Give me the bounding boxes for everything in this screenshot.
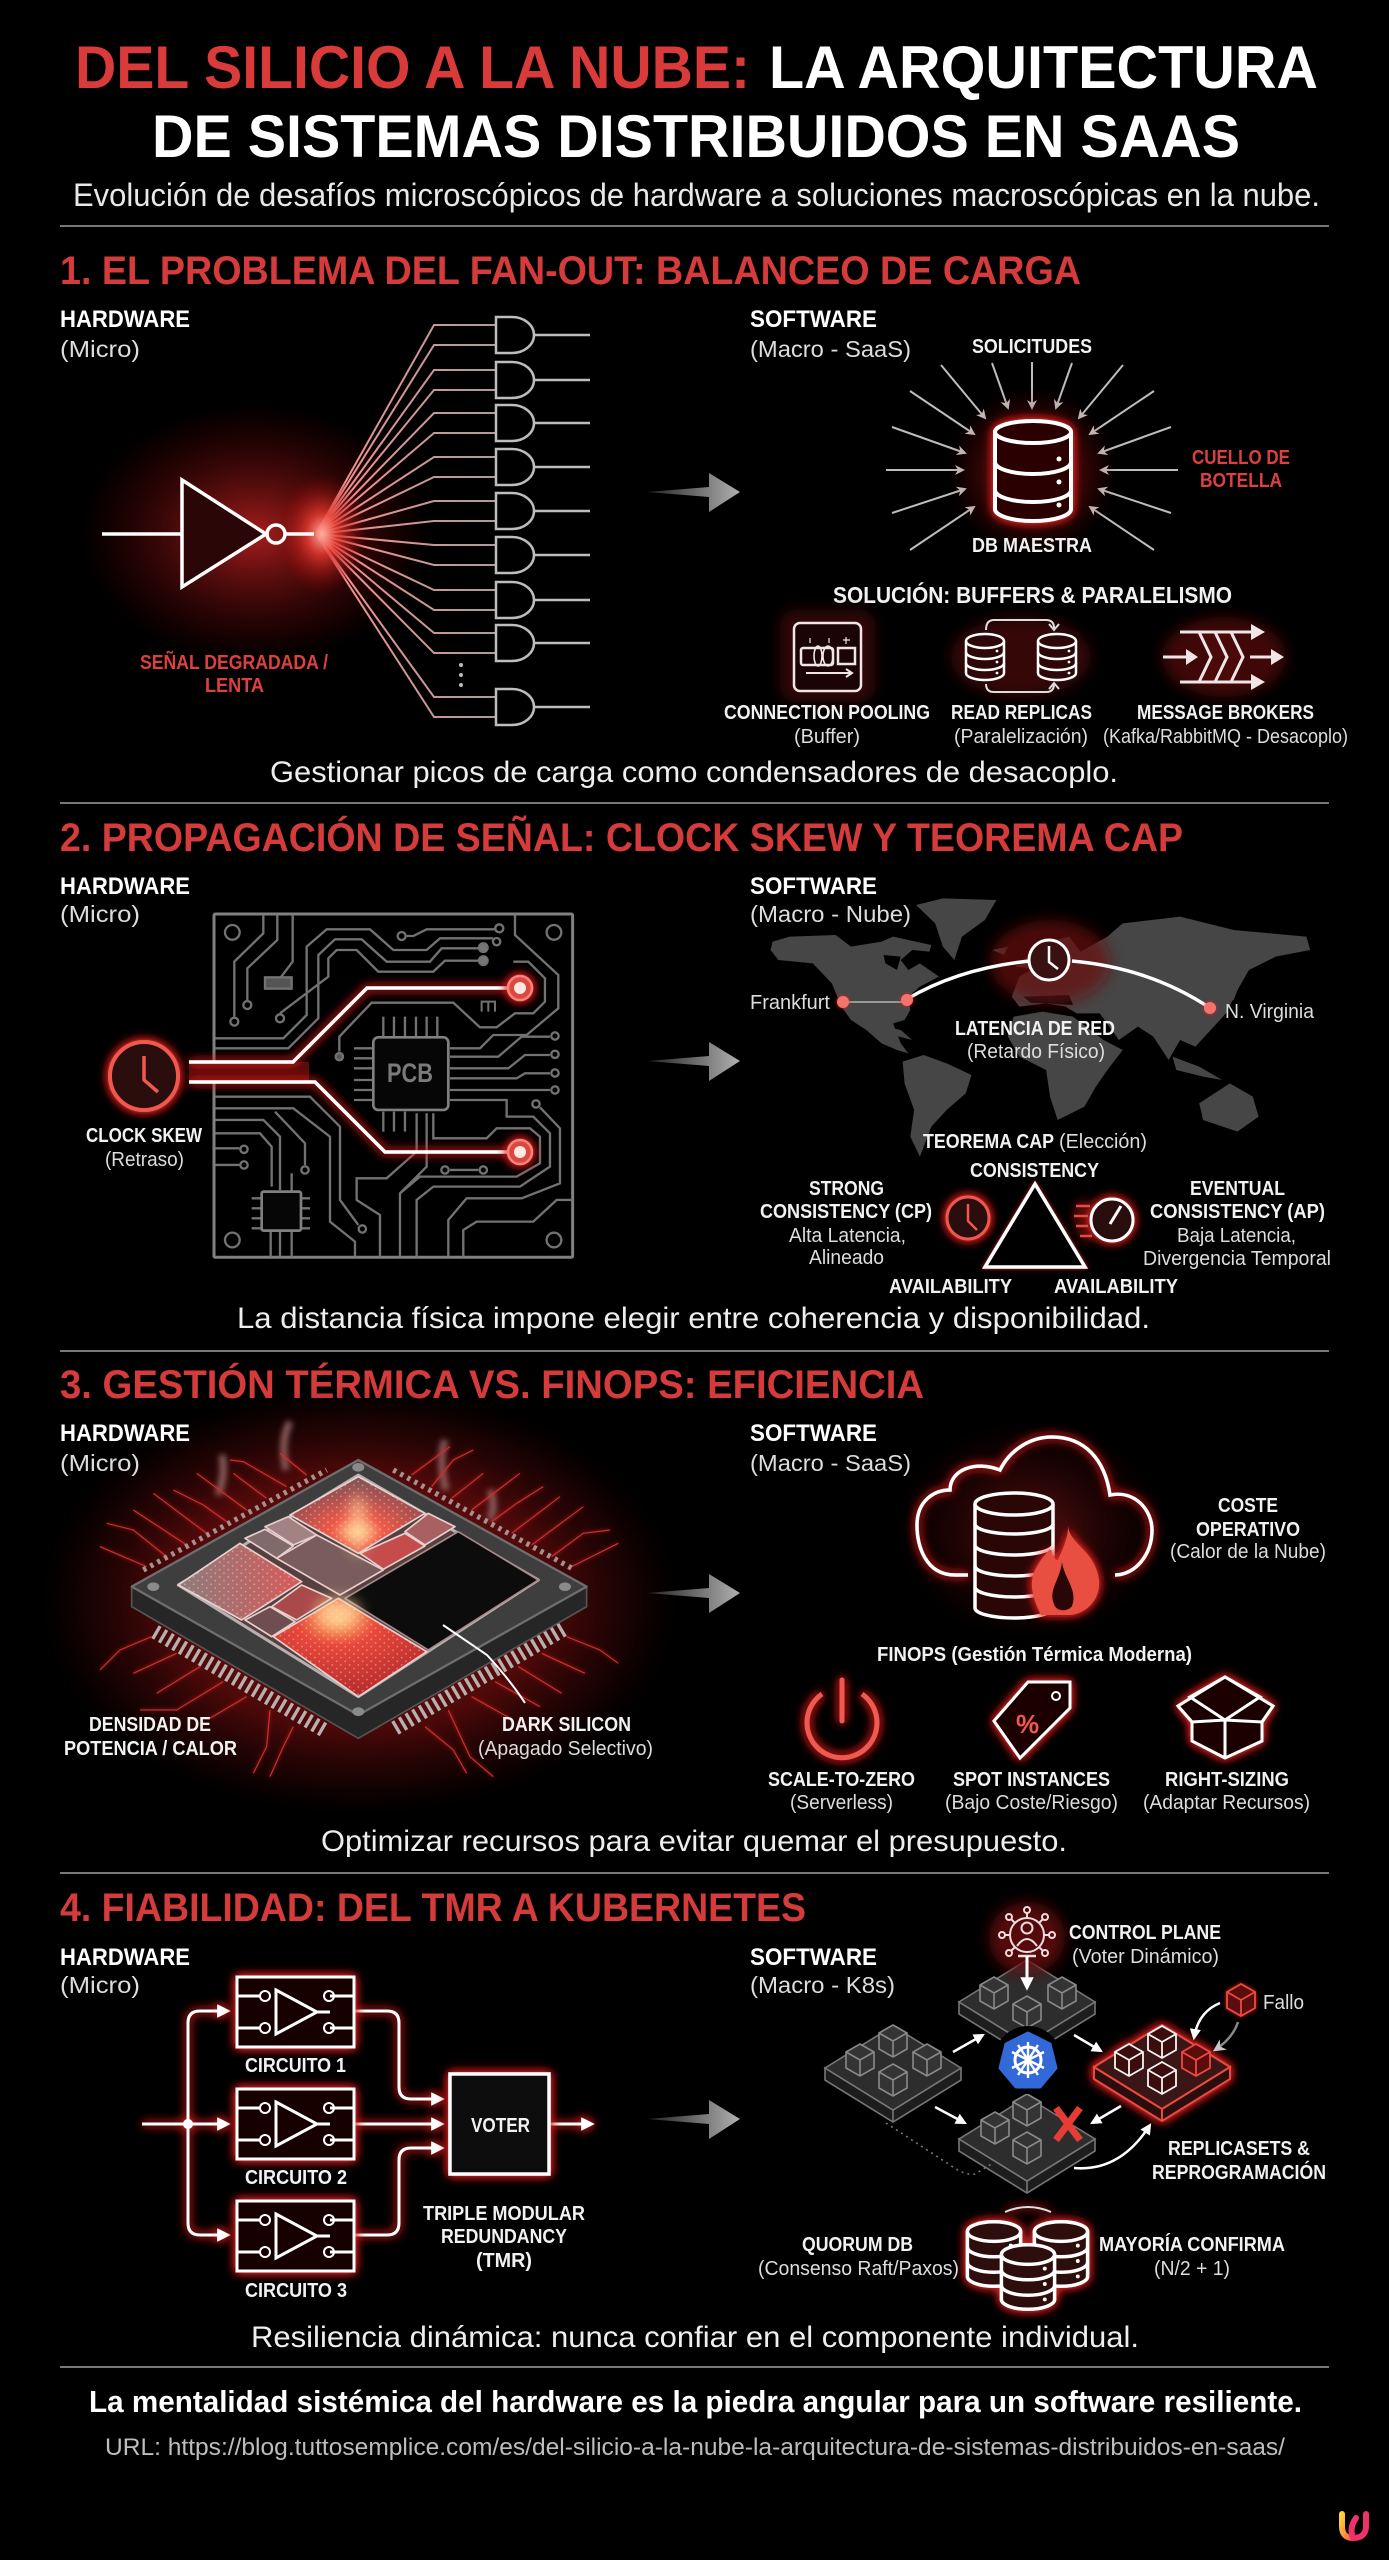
map labels — [750, 992, 1315, 1063]
cap triangle — [985, 1184, 1085, 1267]
quorum labels: (N/2 + 1) — [1154, 2258, 1230, 2280]
software label — [750, 1420, 911, 1476]
hardware label: (Micro) — [60, 901, 140, 927]
tmr label — [423, 2203, 585, 2272]
heading 1: 1. EL PROBLEMA DEL FAN-OUT: BALANCEO DE CARGA — [60, 249, 1081, 293]
cost label: OPERATIVO — [1196, 1519, 1300, 1541]
chip and die — [132, 1460, 587, 1738]
control plane label — [1069, 1922, 1221, 1968]
chip labels — [64, 1714, 653, 1760]
solution labels: (Buffer) — [794, 726, 860, 748]
icon: quorum db — [967, 2207, 1088, 2309]
map labels: LATENCIA DE RED — [955, 1018, 1115, 1040]
tag percent: % — [1016, 1709, 1039, 1739]
arrow — [647, 1042, 740, 1081]
title: LA ARQUITECTURA — [769, 34, 1318, 101]
finops labels: RIGHT-SIZING — [1165, 1769, 1289, 1791]
finops labels: SPOT INSTANCES — [953, 1769, 1110, 1791]
failed cube — [1227, 1984, 1255, 2016]
red label degraded signal: LENTA — [205, 675, 264, 697]
cap labels: Alta Latencia, — [789, 1225, 906, 1247]
solution labels — [724, 702, 1348, 748]
clock skew label: CLOCK SKEW — [86, 1125, 202, 1147]
cap labels: Baja Latencia, — [1177, 1225, 1296, 1247]
pcb chip label: PCB — [387, 1058, 433, 1088]
circuit labels: CIRCUITO 2 — [245, 2167, 347, 2189]
panel: section 3 thermal — [39, 1361, 1326, 1858]
quorum labels: QUORUM DB — [802, 2234, 913, 2256]
icon: box — [1178, 1677, 1273, 1758]
software label: (Macro - K8s) — [750, 1972, 895, 1998]
glow behind inverter — [80, 404, 430, 664]
master database icon — [948, 387, 1118, 557]
solution labels: (Paralelización) — [954, 726, 1088, 748]
logic gates — [459, 317, 590, 725]
caption 4: Resiliencia dinámica: nunca confiar en el componente individual. — [251, 2321, 1139, 2354]
circuit labels: CIRCUITO 1 — [245, 2055, 346, 2077]
tmr label: TRIPLE MODULAR — [423, 2203, 585, 2225]
chip pins lower — [155, 1628, 565, 1732]
skew glow band — [189, 1062, 309, 1082]
heat wisps — [218, 1422, 493, 1520]
cap heading: TEOREMA CAP — [923, 1131, 1054, 1153]
clock skew label — [86, 1125, 202, 1171]
pcb traces — [214, 914, 573, 1257]
quorum labels: MAYORÍA CONFIRMA — [1099, 2233, 1285, 2256]
icon: slow clock — [947, 1197, 989, 1239]
software label: (Macro - SaaS) — [750, 1450, 911, 1476]
glow at fan origin — [277, 474, 367, 594]
bottleneck label: CUELLO DE — [1192, 447, 1290, 469]
finops labels: (Bajo Coste/Riesgo) — [945, 1792, 1118, 1814]
hardware label — [60, 1420, 190, 1476]
hardware label — [60, 1944, 190, 1998]
chip labels: DENSIDAD DE — [89, 1714, 211, 1736]
voter label: VOTER — [471, 2115, 530, 2137]
solution labels: (Kafka/RabbitMQ - Desacoplo) — [1103, 726, 1348, 748]
finops labels: (Serverless) — [790, 1792, 893, 1814]
tmr label: (TMR) — [476, 2250, 532, 2272]
software label: (Macro - SaaS) — [750, 336, 911, 362]
map labels: N. Virginia — [1225, 1001, 1315, 1023]
software label — [750, 873, 911, 927]
subtitle: Evolución de desafíos microscópicos de hardware a soluciones macroscópicas en la nube. — [73, 177, 1320, 213]
finops labels — [768, 1769, 1310, 1814]
cost label — [1170, 1495, 1326, 1563]
chip labels: (Apagado Selectivo) — [478, 1738, 653, 1760]
map labels: Frankfurt — [750, 992, 830, 1014]
hardware label: HARDWARE — [60, 1420, 190, 1447]
arrow — [647, 1574, 740, 1613]
heading 3: 3. GESTIÓN TÉRMICA VS. FINOPS: EFICIENCIA — [60, 1361, 924, 1407]
cluster arrows — [886, 2003, 1238, 2174]
cap labels — [760, 1160, 1331, 1298]
heading 2: 2. PROPAGACIÓN DE SEÑAL: CLOCK SKEW Y TEOREMA CAP — [60, 814, 1183, 860]
panel: section 1 fan-out — [60, 249, 1348, 789]
arrow — [647, 473, 740, 512]
cap labels: EVENTUAL — [1190, 1178, 1285, 1200]
cap labels: STRONG — [809, 1178, 884, 1200]
caption 1: Gestionar picos de carga como condensadores de desacoplo. — [270, 756, 1118, 789]
cap labels: Divergencia Temporal — [1143, 1248, 1331, 1270]
cap labels: CONSISTENCY — [970, 1160, 1100, 1182]
die hot spots — [316, 1495, 366, 1626]
fallo label: Fallo — [1263, 1992, 1304, 2014]
software label: SOFTWARE — [750, 1420, 877, 1447]
clock skew label: (Retraso) — [105, 1149, 184, 1171]
cap labels: CONSISTENCY (CP) — [760, 1201, 932, 1223]
circuits — [237, 1977, 354, 2271]
cap labels: AVAILABILITY — [889, 1276, 1013, 1298]
cost label: (Calor de la Nube) — [1170, 1541, 1326, 1563]
icon: connection pooling — [780, 610, 875, 702]
world map — [771, 898, 1310, 1157]
inverter symbol — [102, 480, 314, 587]
hardware label: HARDWARE — [60, 306, 190, 333]
db label: DB MAESTRA — [972, 535, 1092, 557]
cap heading: (Elección) — [1059, 1131, 1147, 1153]
quorum labels — [758, 2233, 1285, 2280]
slab: top — [959, 1960, 1095, 2056]
circuit labels: CIRCUITO 3 — [245, 2280, 347, 2302]
icon: price tag — [994, 1682, 1070, 1758]
chip labels: DARK SILICON — [502, 1714, 631, 1736]
software label: (Macro - Nube) — [750, 901, 911, 927]
cost label: COSTE — [1218, 1495, 1278, 1517]
tmr label: REDUNDANCY — [441, 2226, 568, 2248]
icon: logo — [1342, 2514, 1366, 2538]
bottleneck label — [1192, 447, 1290, 492]
control arrow — [1026, 1956, 1028, 1988]
icon: cloud with database and flame — [895, 1420, 1165, 1640]
tmr wiring — [142, 2011, 592, 2235]
caption 3: Optimizar recursos para evitar quemar el presupuesto. — [321, 1825, 1067, 1858]
slab: right failed — [1094, 2025, 1230, 2121]
cap labels: AVAILABILITY — [1054, 1276, 1179, 1298]
hardware label: HARDWARE — [60, 1944, 190, 1971]
red label degraded signal: SEÑAL DEGRADADA / — [140, 651, 328, 674]
panel: section 2 propagation — [60, 814, 1331, 1335]
slab: left — [825, 2025, 961, 2122]
map labels: (Retardo Físico) — [967, 1041, 1105, 1063]
finops heading: FINOPS (Gestión Térmica Moderna) — [877, 1644, 1192, 1666]
hardware label: (Micro) — [60, 1450, 140, 1476]
chip pins upper — [143, 1470, 575, 1570]
software label: SOFTWARE — [750, 1944, 877, 1971]
title: DE SISTEMAS DISTRIBUIDOS EN SAAS — [152, 103, 1240, 170]
heading 4: 4. FIABILIDAD: DEL TMR A KUBERNETES — [60, 1886, 806, 1930]
kubernetes badge — [994, 2026, 1062, 2094]
hardware label: HARDWARE — [60, 873, 190, 900]
voter box — [450, 2074, 549, 2174]
software label — [750, 306, 911, 362]
clock skew traces — [189, 988, 510, 1152]
request arrows — [886, 362, 1178, 550]
hardware label — [60, 306, 190, 362]
chip labels: POTENCIA / CALOR — [64, 1738, 238, 1760]
software label: SOFTWARE — [750, 873, 877, 900]
cap labels: Alineado — [809, 1247, 884, 1269]
leader line — [443, 1625, 525, 1703]
hardware label: (Micro) — [60, 336, 140, 362]
heat streaks — [100, 1447, 618, 1777]
finops labels: SCALE-TO-ZERO — [768, 1769, 915, 1791]
latency arc — [837, 920, 1216, 1014]
software label — [750, 1944, 895, 1998]
replicasets label — [1152, 2138, 1326, 2184]
control plane label: CONTROL PLANE — [1069, 1922, 1221, 1944]
icon: clock — [110, 1042, 178, 1110]
source url: URL: https://blog.tuttosemplice.com/es/del-silicio-a-la-nube-la-arquitectura-de-sistemas-distribuidos-en-saas/ — [105, 2434, 1285, 2461]
requests label: SOLICITUDES — [972, 336, 1092, 358]
hardware label: (Micro) — [60, 1972, 140, 1998]
chip glow — [39, 1385, 679, 1815]
finops labels: (Adaptar Recursos) — [1143, 1792, 1310, 1814]
solution heading: SOLUCIÓN: BUFFERS & PARALELISMO — [833, 581, 1232, 608]
circuit labels — [245, 2055, 347, 2302]
trace endpoints — [508, 976, 532, 1164]
title: DEL SILICIO A LA NUBE: — [75, 34, 750, 101]
footer conclusion: La mentalidad sistémica del hardware es la piedra angular para un software resiliente. — [89, 2384, 1302, 2419]
replicasets label: REPROGRAMACIÓN — [1152, 2160, 1326, 2184]
solution labels: READ REPLICAS — [951, 702, 1092, 724]
solution labels: MESSAGE BROKERS — [1137, 702, 1314, 724]
control plane label: (Voter Dinámico) — [1072, 1946, 1219, 1968]
failure mark — [1056, 2108, 1080, 2140]
icon: read replicas — [951, 617, 1091, 697]
replicasets label: REPLICASETS & — [1168, 2138, 1310, 2160]
software label: SOFTWARE — [750, 306, 877, 333]
panel: section 4 reliability — [60, 1886, 1326, 2354]
bottleneck label: BOTELLA — [1200, 470, 1282, 492]
solution labels: CONNECTION POOLING — [724, 702, 930, 724]
title — [75, 34, 1318, 170]
arrow — [647, 2100, 740, 2139]
quorum labels: (Consenso Raft/Paxos) — [758, 2258, 959, 2280]
cap heading — [923, 1131, 1147, 1153]
red label degraded signal — [140, 651, 328, 697]
cap labels: CONSISTENCY (AP) — [1150, 1201, 1325, 1223]
fan-out lines — [316, 325, 496, 717]
icon: control plane — [989, 1902, 1065, 1974]
slab: bottom — [959, 2094, 1095, 2193]
icon: speedometer — [1074, 1199, 1133, 1241]
caption 2: La distancia física impone elegir entre coherencia y disponibilidad. — [237, 1302, 1150, 1335]
hardware label — [60, 873, 190, 927]
icon: power — [807, 1680, 877, 1758]
icon: message brokers — [1162, 617, 1286, 697]
